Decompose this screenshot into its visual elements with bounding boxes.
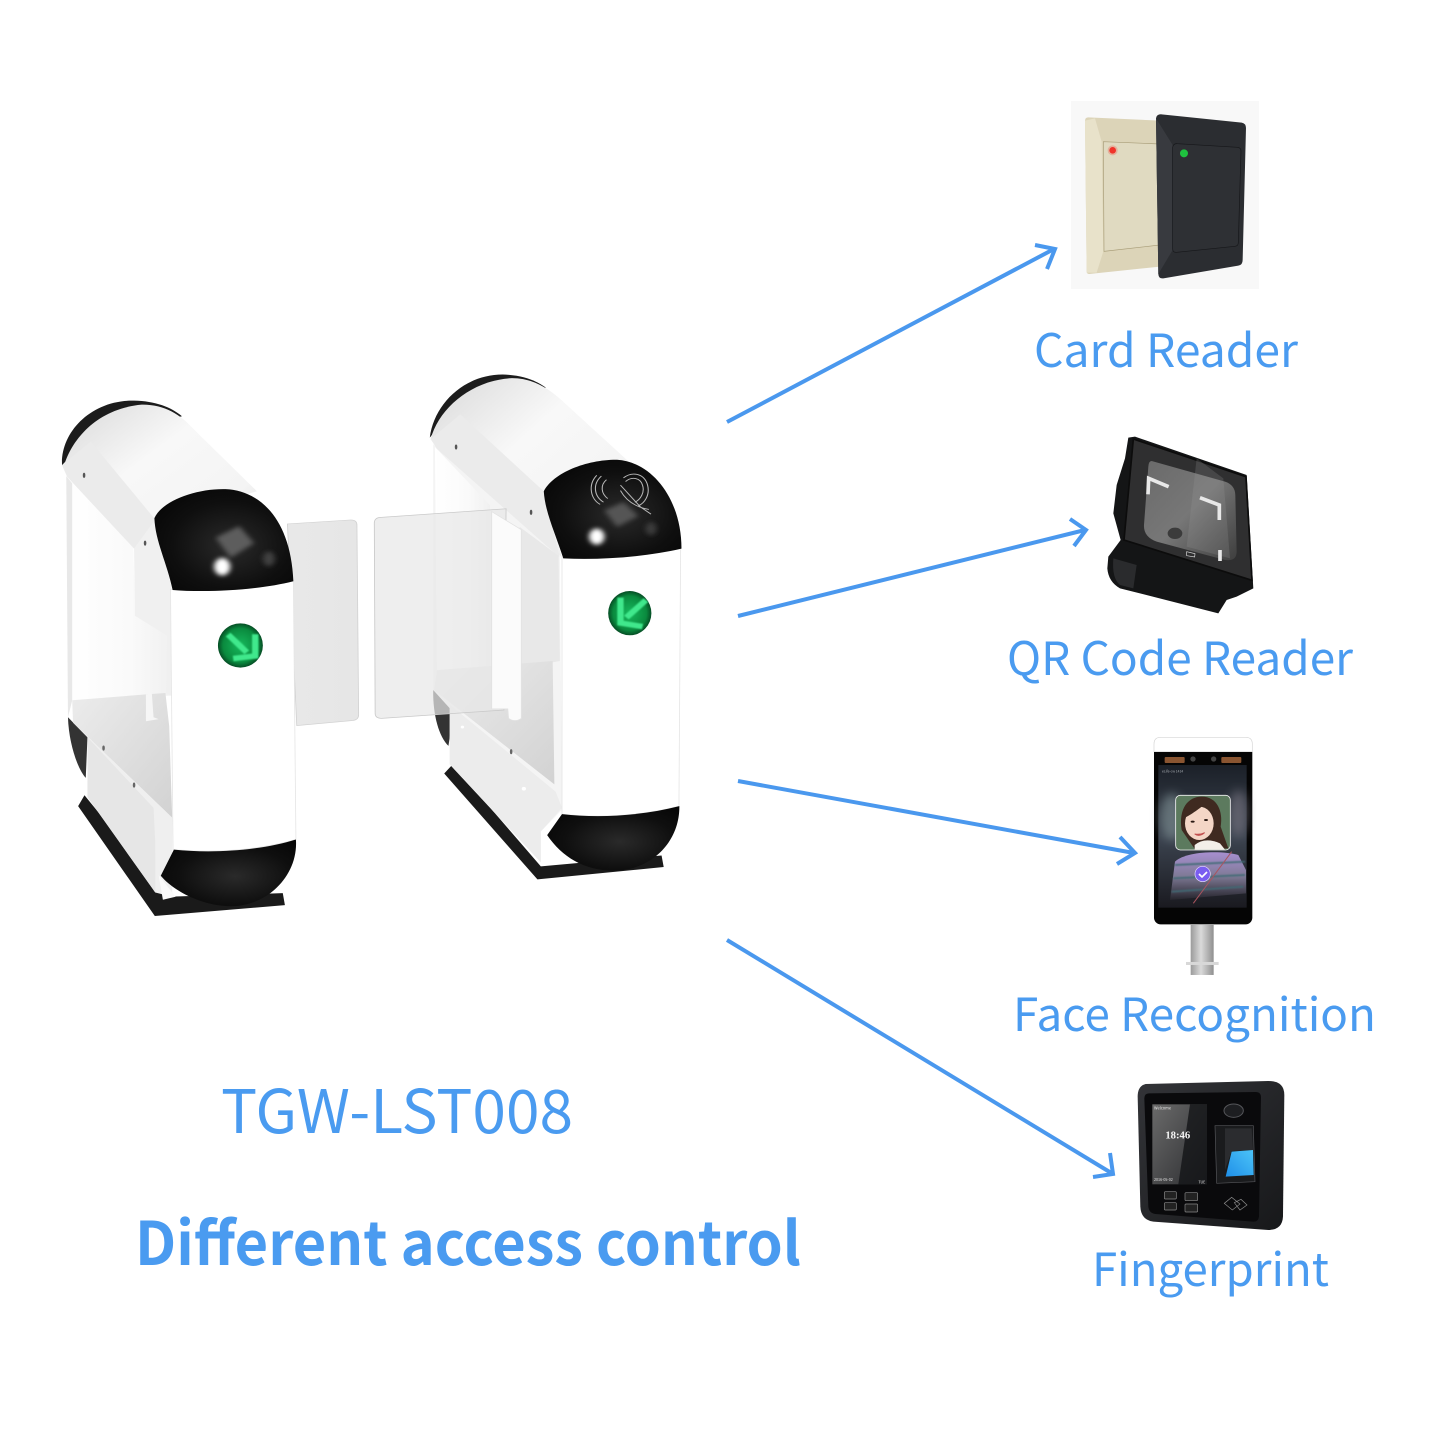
icon: fingerprint terminal: [1138, 1081, 1284, 1230]
terminal screen: Welcome: [1154, 1106, 1172, 1112]
terminal body: [1154, 737, 1252, 924]
arrow: to card reader: [727, 245, 1055, 422]
terminal body: [1138, 1081, 1284, 1230]
screen status text: eLife-cw 1414: [1162, 768, 1183, 773]
label: fingerprint: Fingerprint: [1092, 1234, 1329, 1300]
terminal screen: 18:46: [1165, 1131, 1191, 1142]
right gate white front: [562, 547, 681, 816]
screen: [1124, 439, 1252, 580]
model number: TGW-LST008: [221, 1064, 573, 1151]
headline: Different access control: [135, 1196, 801, 1283]
right gate green arrow indicator: [608, 591, 651, 635]
left gate black top cap: [154, 489, 293, 591]
product image: swing turnstile gate: [62, 375, 681, 916]
arrow: to QR code reader: [738, 519, 1086, 616]
icon: QR code reader product: [1107, 437, 1253, 613]
label: face recognition: Face Recognition: [1013, 979, 1376, 1045]
terminal screen: 2016-05-02: [1154, 1178, 1173, 1183]
label: card reader: Card Reader: [1034, 315, 1298, 381]
left glass wing: [287, 520, 359, 726]
terminal screen: TUE: [1198, 1180, 1205, 1185]
camera: [1224, 1104, 1243, 1117]
beige reader: [1085, 117, 1160, 274]
face scan photo: [1176, 795, 1230, 850]
mounting pole: [1186, 925, 1219, 975]
left gate black bottom cap: [161, 839, 296, 906]
left gate cabinet: [62, 401, 285, 916]
label: QR code reader: QR Code Reader: [1007, 623, 1353, 689]
housing: [1107, 437, 1253, 613]
arrow: to face recognition: [738, 781, 1135, 864]
keypad: [1164, 1192, 1198, 1212]
left gate green arrow indicator: [218, 623, 263, 668]
icon: card reader product: [1071, 101, 1259, 289]
right gate cabinet: [430, 375, 664, 879]
verified check badge: [1195, 866, 1210, 882]
card tap icon: [1224, 1197, 1247, 1210]
right gate white post: [492, 512, 521, 721]
terminal screen: [1152, 1104, 1207, 1185]
right glass wing: [374, 509, 506, 718]
right gate black bottom cap: [547, 806, 679, 871]
icon: contactless card tap: [591, 474, 651, 514]
right gate black top cap: [544, 460, 681, 559]
black reader: [1156, 114, 1246, 278]
arrow: to fingerprint: [727, 940, 1113, 1177]
left gate white front: [170, 581, 296, 851]
screen: [1158, 765, 1248, 908]
fingerprint sensor: [1215, 1126, 1255, 1183]
icon: face recognition terminal: [1154, 737, 1252, 975]
